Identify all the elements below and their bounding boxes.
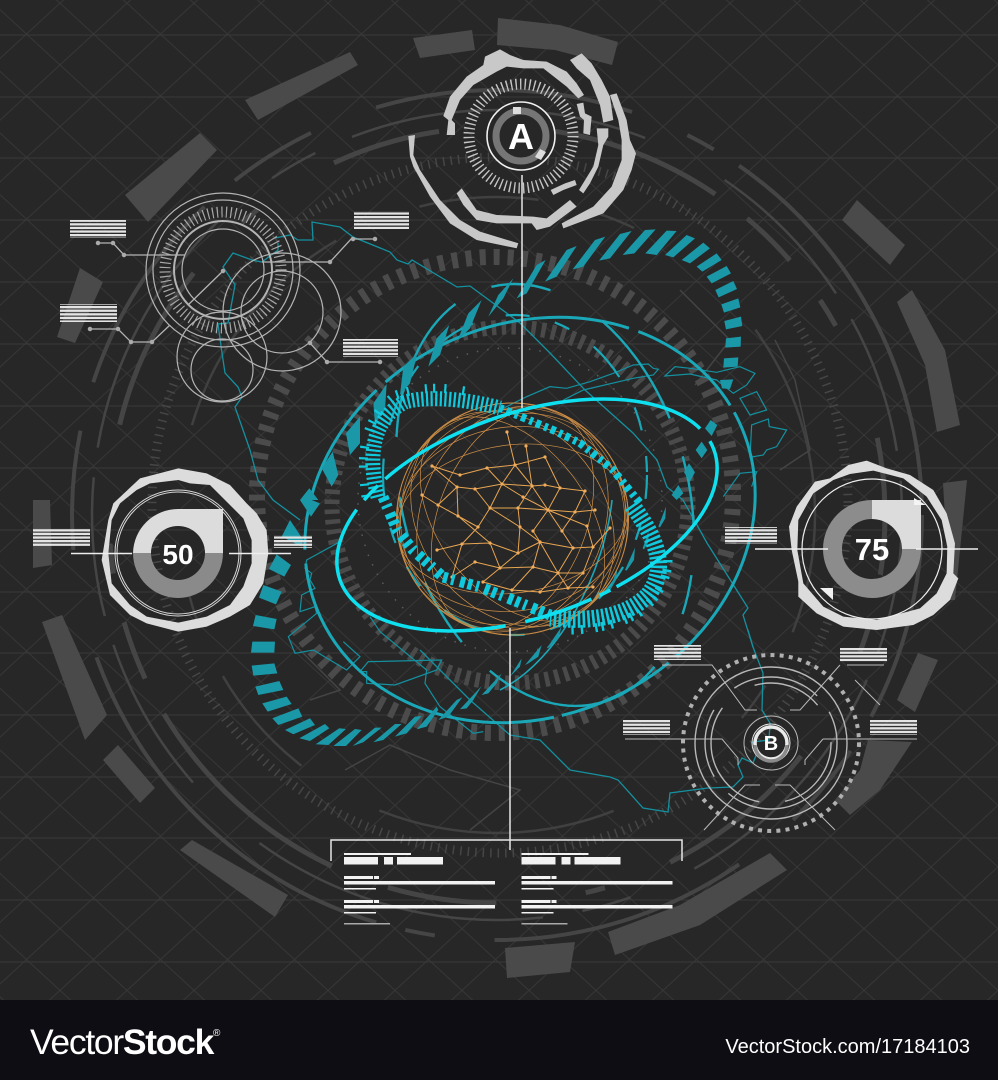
teal orbit ellipses [238, 245, 822, 795]
donut gauge [832, 510, 912, 588]
connector dots [90, 238, 380, 362]
label boxes [33, 211, 917, 735]
irregular ring [102, 468, 268, 632]
gray hatched rings [257, 257, 733, 733]
footer watermark band: ® [213, 1028, 221, 1039]
widget: B: B [764, 733, 778, 755]
teal circuit lines [218, 222, 787, 812]
widget: 50 [71, 468, 291, 632]
left column [344, 853, 495, 924]
tick ring [469, 84, 573, 188]
irregular ring [789, 461, 958, 630]
connector lines [510, 175, 522, 850]
footer watermark band [0, 1000, 998, 1080]
widget: 75 [755, 461, 978, 630]
widget: upper-left circles [90, 193, 380, 402]
footer watermark band: VectorStock.com/17184103 [725, 1036, 970, 1058]
lower-left squiggles [288, 542, 360, 670]
teal hatched ribbon ring [251, 229, 742, 746]
widget: 75: 75 [855, 532, 889, 567]
widget: A: A [508, 116, 534, 157]
widget: A [408, 49, 636, 248]
widget: 50: 50 [162, 539, 194, 570]
right column [522, 853, 672, 924]
footer watermark band: VectorStock [30, 1022, 213, 1062]
bright cyan orbit [307, 354, 747, 676]
cyan equalizer ring [363, 388, 668, 630]
broken outer rings [443, 49, 584, 135]
bottom data panel [331, 840, 682, 924]
wireframe sphere [355, 362, 670, 676]
donut gauge [133, 509, 223, 553]
right squiggles [500, 364, 658, 410]
outer HUD rings [72, 90, 922, 940]
widget: B [625, 655, 917, 831]
